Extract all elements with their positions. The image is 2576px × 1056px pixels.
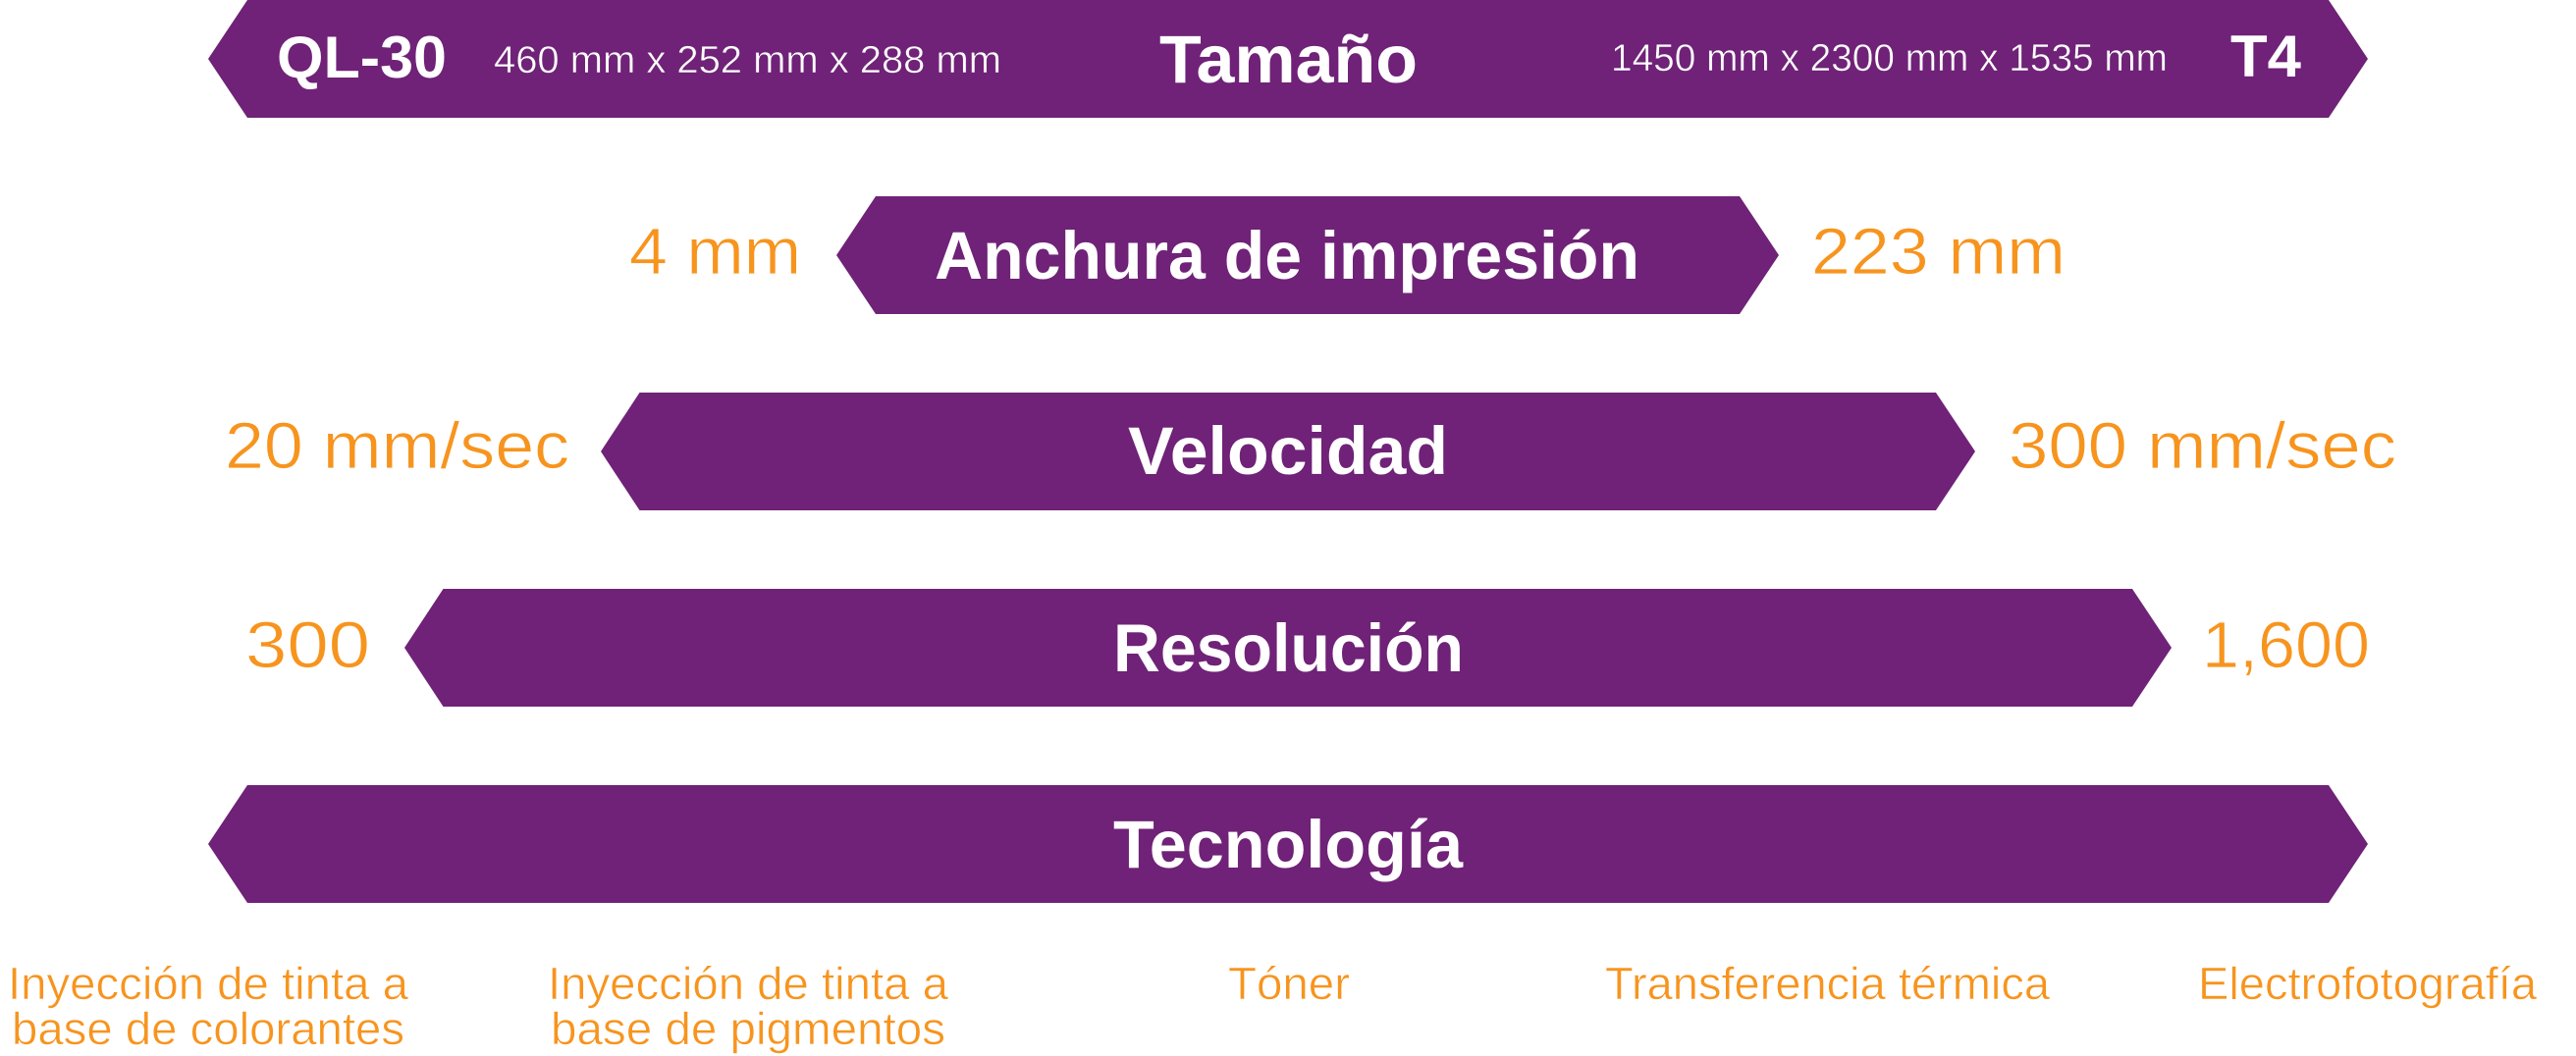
technology: dye-based inkjet: base de colorantes bbox=[12, 1003, 404, 1054]
minimum resolution: 300 bbox=[245, 608, 370, 682]
heading: Resolución: Resolución bbox=[1113, 610, 1464, 686]
model label: QL-30: QL-30 bbox=[277, 25, 447, 90]
maximum resolution: 1,600 bbox=[2202, 608, 2370, 682]
technology: thermal transfer: Transferencia térmica bbox=[1605, 958, 2050, 1009]
heading: Anchura de impresión: Anchura de impresión bbox=[935, 218, 1639, 293]
dimensions: T4: 1450 mm x 2300 mm x 1535 mm bbox=[1611, 37, 2168, 79]
technology: pigment-based inkjet: base de pigmentos bbox=[551, 1003, 945, 1054]
minimum speed: 20 mm/sec bbox=[225, 409, 569, 483]
heading: Velocidad: Velocidad bbox=[1128, 413, 1448, 489]
panel: Resolución bar bbox=[404, 589, 2172, 707]
maximum print width: 223 mm bbox=[1811, 215, 2066, 289]
technology: pigment-based inkjet: Inyección de tinta a bbox=[548, 958, 948, 1009]
minimum print width: 4 mm bbox=[629, 215, 801, 289]
maximum speed: 300 mm/sec bbox=[2009, 409, 2396, 483]
panel: Velocidad bar bbox=[601, 393, 1975, 510]
dimensions: QL-30: 460 mm x 252 mm x 288 mm bbox=[494, 39, 1001, 81]
heading: Tamaño: Tamaño bbox=[1159, 22, 1418, 97]
technology: toner: Tóner bbox=[1228, 958, 1350, 1009]
technology: dye-based inkjet: Inyección de tinta a bbox=[8, 958, 408, 1009]
panel: Tecnología bar bbox=[208, 785, 2368, 903]
panel: Tamaño bar bbox=[208, 0, 2368, 118]
technology: dye-based inkjet bbox=[8, 958, 408, 1054]
model label: T4: T4 bbox=[2230, 24, 2302, 89]
technology: electrophotography: Electrofotografía bbox=[2198, 958, 2537, 1009]
heading: Tecnología: Tecnología bbox=[1113, 807, 1464, 882]
panel: Anchura de impresión bar bbox=[836, 196, 1779, 314]
technology: pigment-based inkjet bbox=[548, 958, 948, 1054]
